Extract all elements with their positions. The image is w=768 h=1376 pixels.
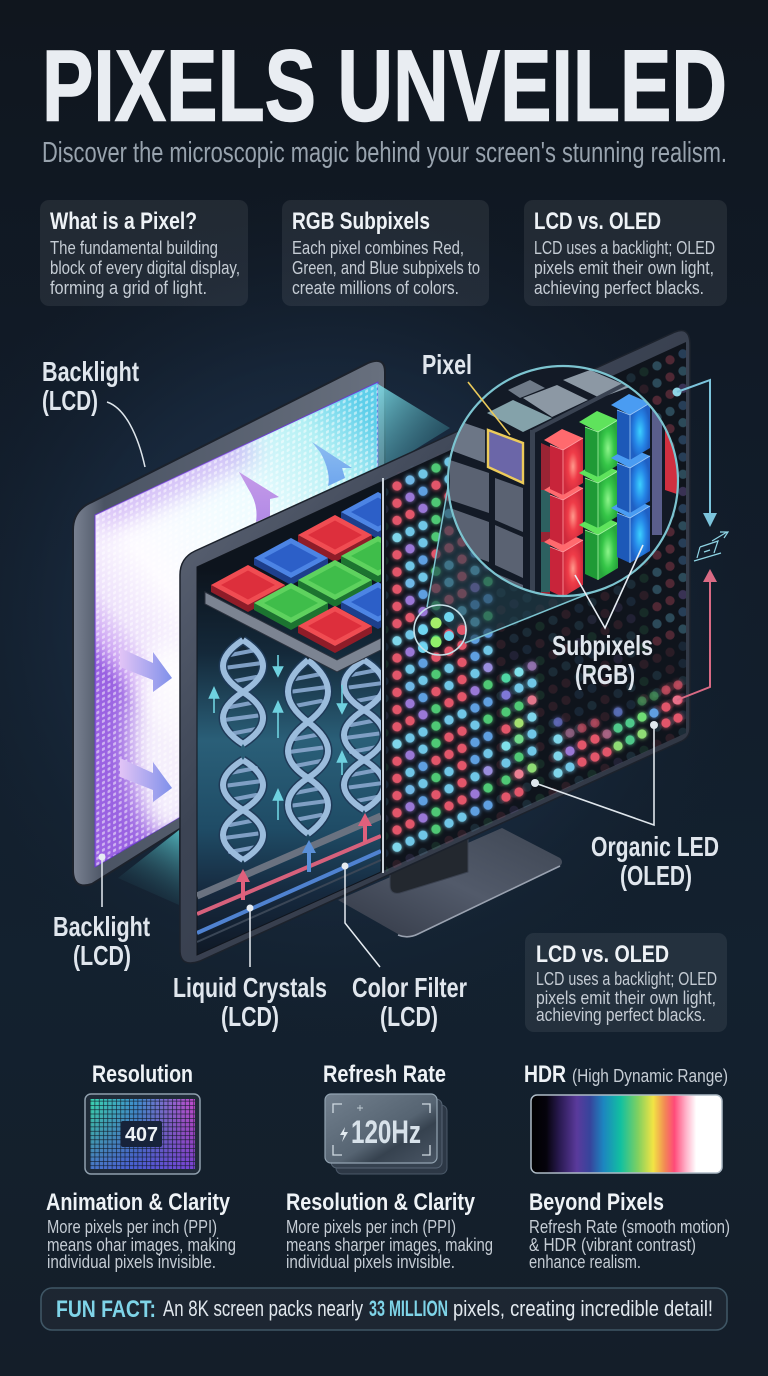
- helix: left upper: [223, 640, 263, 744]
- OLED screen background: [381, 342, 686, 872]
- heading: RGB subpixels: RGB Subpixels: [292, 208, 430, 235]
- heading: HDR: [524, 1061, 728, 1088]
- icon: refresh rate card stack: [325, 1094, 447, 1174]
- back panel: backlight: [73, 361, 385, 885]
- dots: middle block: [501, 661, 537, 802]
- fun fact bar: 33 MILLION: [369, 1296, 448, 1321]
- text: what is a pixel: The fundamental building: [50, 238, 218, 258]
- arrow: OLED red path: [672, 569, 717, 704]
- text: RGB subpixels: Each pixel combines Red,: [292, 238, 464, 258]
- LCD section: [197, 482, 384, 955]
- callout line: top backlight: [107, 402, 145, 467]
- lens top tiles: [487, 370, 630, 432]
- arrow: light right lower: [120, 758, 172, 802]
- label: backlight top: Backlight: [42, 356, 139, 387]
- text: resolution and clarity: [286, 1217, 493, 1272]
- label: backlight bottom: Backlight: [53, 911, 150, 942]
- green subpixels: [579, 411, 618, 580]
- arrow: blue up: [312, 442, 352, 486]
- heading: HDR: HDR: [524, 1061, 566, 1088]
- label: color filter: Color Filter: [352, 972, 467, 1003]
- tile: blue front: [341, 582, 381, 629]
- callout lines: OLED: [531, 721, 658, 825]
- heading: animation and clarity: Animation & Clarity: [46, 1189, 231, 1216]
- tile: blue mid: [254, 538, 328, 585]
- optical layers: [197, 816, 381, 942]
- text: what is a pixel: [50, 238, 240, 298]
- label: organic LED: Organic LED: [591, 831, 719, 862]
- lens left tiles: [450, 418, 523, 600]
- tile: red back: [298, 515, 372, 562]
- heading: LCD vs OLED top: LCD vs. OLED: [534, 208, 661, 235]
- text: beyond pixels: enhance realism.: [529, 1252, 641, 1272]
- tile: blue back: [341, 492, 381, 538]
- label: subpixels: (RGB): [575, 659, 635, 690]
- icon: small panel glyph: [694, 532, 728, 561]
- heading: resolution and clarity: Resolution & Clarity: [286, 1189, 476, 1216]
- callout line: color filter: [342, 862, 380, 967]
- yellow pixel highlight: [488, 430, 523, 483]
- callout line: pixel: [468, 382, 510, 435]
- callout lines: subpixels: [575, 545, 643, 628]
- text: LCD vs OLED lower: [536, 969, 717, 1025]
- panel: LCD vs OLED top: [524, 200, 727, 306]
- tile: green mid: [298, 560, 372, 607]
- label: liquid crystals: (LCD): [221, 1001, 279, 1032]
- heading: what is a pixel: What is a Pixel?: [50, 208, 197, 235]
- small alignment arrows: [210, 655, 346, 820]
- magnifier lens: [448, 366, 680, 600]
- label: backlight top: [42, 356, 139, 416]
- tile: red front: [298, 606, 372, 653]
- LCD OLED divider: [382, 478, 384, 873]
- callout line: bottom backlight: [98, 854, 106, 907]
- tile: green back: [341, 536, 381, 582]
- label: organic LED: (OLED): [620, 860, 692, 891]
- arrow: OLED blue path: [672, 380, 717, 527]
- text: LCD vs OLED top: achieving perfect blacks.: [534, 278, 704, 298]
- text: LCD vs OLED lower: achieving perfect blacks.: [536, 1005, 706, 1025]
- column: beyond pixels: [529, 1189, 730, 1272]
- label: subpixels: Subpixels: [552, 630, 653, 661]
- text: resolution and clarity: means sharper images, making: [286, 1235, 493, 1255]
- heading: resolution: Resolution: [92, 1061, 193, 1088]
- label: backlight bottom: (LCD): [73, 940, 131, 971]
- label: backlight top: (LCD): [42, 385, 98, 416]
- tile: red front-left: [211, 565, 285, 612]
- icon: HDR spectrum: [531, 1095, 722, 1173]
- label: liquid crystals: [173, 972, 327, 1032]
- label: subpixels: [552, 630, 653, 690]
- diagram: exploded display: [73, 331, 728, 967]
- text: LCD vs OLED lower: pixels emit their own light,: [536, 988, 716, 1008]
- small selection circle: [414, 487, 610, 655]
- text: RGB subpixels: [292, 238, 480, 298]
- blue subpixels: [611, 394, 650, 563]
- text: RGB subpixels: Green, and Blue subpixels to: [292, 258, 480, 278]
- callout line: liquid crystals: [246, 904, 254, 967]
- text: LCD vs OLED top: pixels emit their own light,: [534, 258, 714, 278]
- panel: what is a pixel: [40, 200, 248, 306]
- text: beyond pixels: Refresh Rate (smooth motion): [529, 1217, 730, 1237]
- fun fact bar: An 8K screen packs nearly: [163, 1296, 363, 1321]
- text: resolution and clarity: More pixels per inch (PPI): [286, 1217, 456, 1237]
- arrow: light right upper: [120, 648, 172, 692]
- front panel bezel: [180, 331, 690, 963]
- label: organic LED: [591, 831, 719, 891]
- tile: green front: [254, 583, 328, 630]
- column: animation and clarity: [46, 1189, 236, 1272]
- text: LCD vs OLED lower: LCD uses a backlight; OLED: [536, 969, 717, 989]
- lens dark strips: [541, 405, 680, 600]
- text: what is a pixel: forming a grid of light.: [50, 278, 207, 298]
- label: backlight bottom: [53, 911, 150, 971]
- arrow: purple up: [239, 472, 279, 522]
- zoom beam: [427, 487, 610, 643]
- text: what is a pixel: block of every digital display,: [50, 258, 240, 278]
- text: LCD vs OLED top: [534, 238, 715, 298]
- color filter sheet: [204, 492, 381, 672]
- text: RGB subpixels: create millions of colors.: [292, 278, 459, 298]
- heading: HDR: (High Dynamic Range): [572, 1066, 728, 1086]
- text: animation and clarity: individual pixels invisible.: [47, 1252, 216, 1272]
- lens centre post: [530, 430, 535, 600]
- red subpixels: [544, 429, 583, 597]
- panel: RGB subpixels: [282, 200, 489, 306]
- helix: left lower: [223, 760, 263, 860]
- refresh number: 120Hz: [351, 1114, 421, 1150]
- light beam above: [378, 384, 450, 470]
- heading: beyond pixels: Beyond Pixels: [529, 1189, 664, 1216]
- heading: refresh rate: Refresh Rate: [323, 1061, 446, 1088]
- panel: LCD vs OLED lower: [525, 933, 727, 1032]
- fun fact bar: pixels, creating incredible detail!: [453, 1296, 713, 1321]
- filter slab: [205, 592, 381, 672]
- dots: lower right block: [553, 680, 683, 778]
- text: beyond pixels: & HDR (vibrant contrast): [529, 1235, 696, 1255]
- heading: LCD vs OLED lower: LCD vs. OLED: [536, 941, 669, 968]
- helix: middle: [288, 660, 328, 834]
- label: pixel: Pixel: [422, 349, 472, 380]
- icon: resolution pixel grid: [85, 1094, 200, 1174]
- light wedge below: [118, 830, 179, 905]
- fun fact bar: [41, 1288, 727, 1330]
- text: animation and clarity: [47, 1217, 236, 1272]
- text: LCD vs OLED top: LCD uses a backlight; OLED: [534, 238, 715, 258]
- text: beyond pixels: [529, 1217, 730, 1272]
- fun fact bar: FUN FACT:: [56, 1296, 156, 1323]
- text: animation and clarity: means ohar images, making: [47, 1235, 236, 1255]
- text: animation and clarity: More pixels per inch (PPI): [47, 1217, 217, 1237]
- text: resolution and clarity: individual pixels invisible.: [286, 1252, 455, 1272]
- resolution number: 407: [125, 1124, 158, 1146]
- label: color filter: (LCD): [380, 1001, 438, 1032]
- column: resolution and clarity: [286, 1189, 493, 1272]
- label: liquid crystals: Liquid Crystals: [173, 972, 327, 1003]
- light arrows through layers: [236, 813, 372, 900]
- label: color filter: [352, 972, 467, 1032]
- OLED dots: [386, 342, 686, 872]
- stand: [338, 820, 562, 937]
- helix: right: [344, 660, 384, 810]
